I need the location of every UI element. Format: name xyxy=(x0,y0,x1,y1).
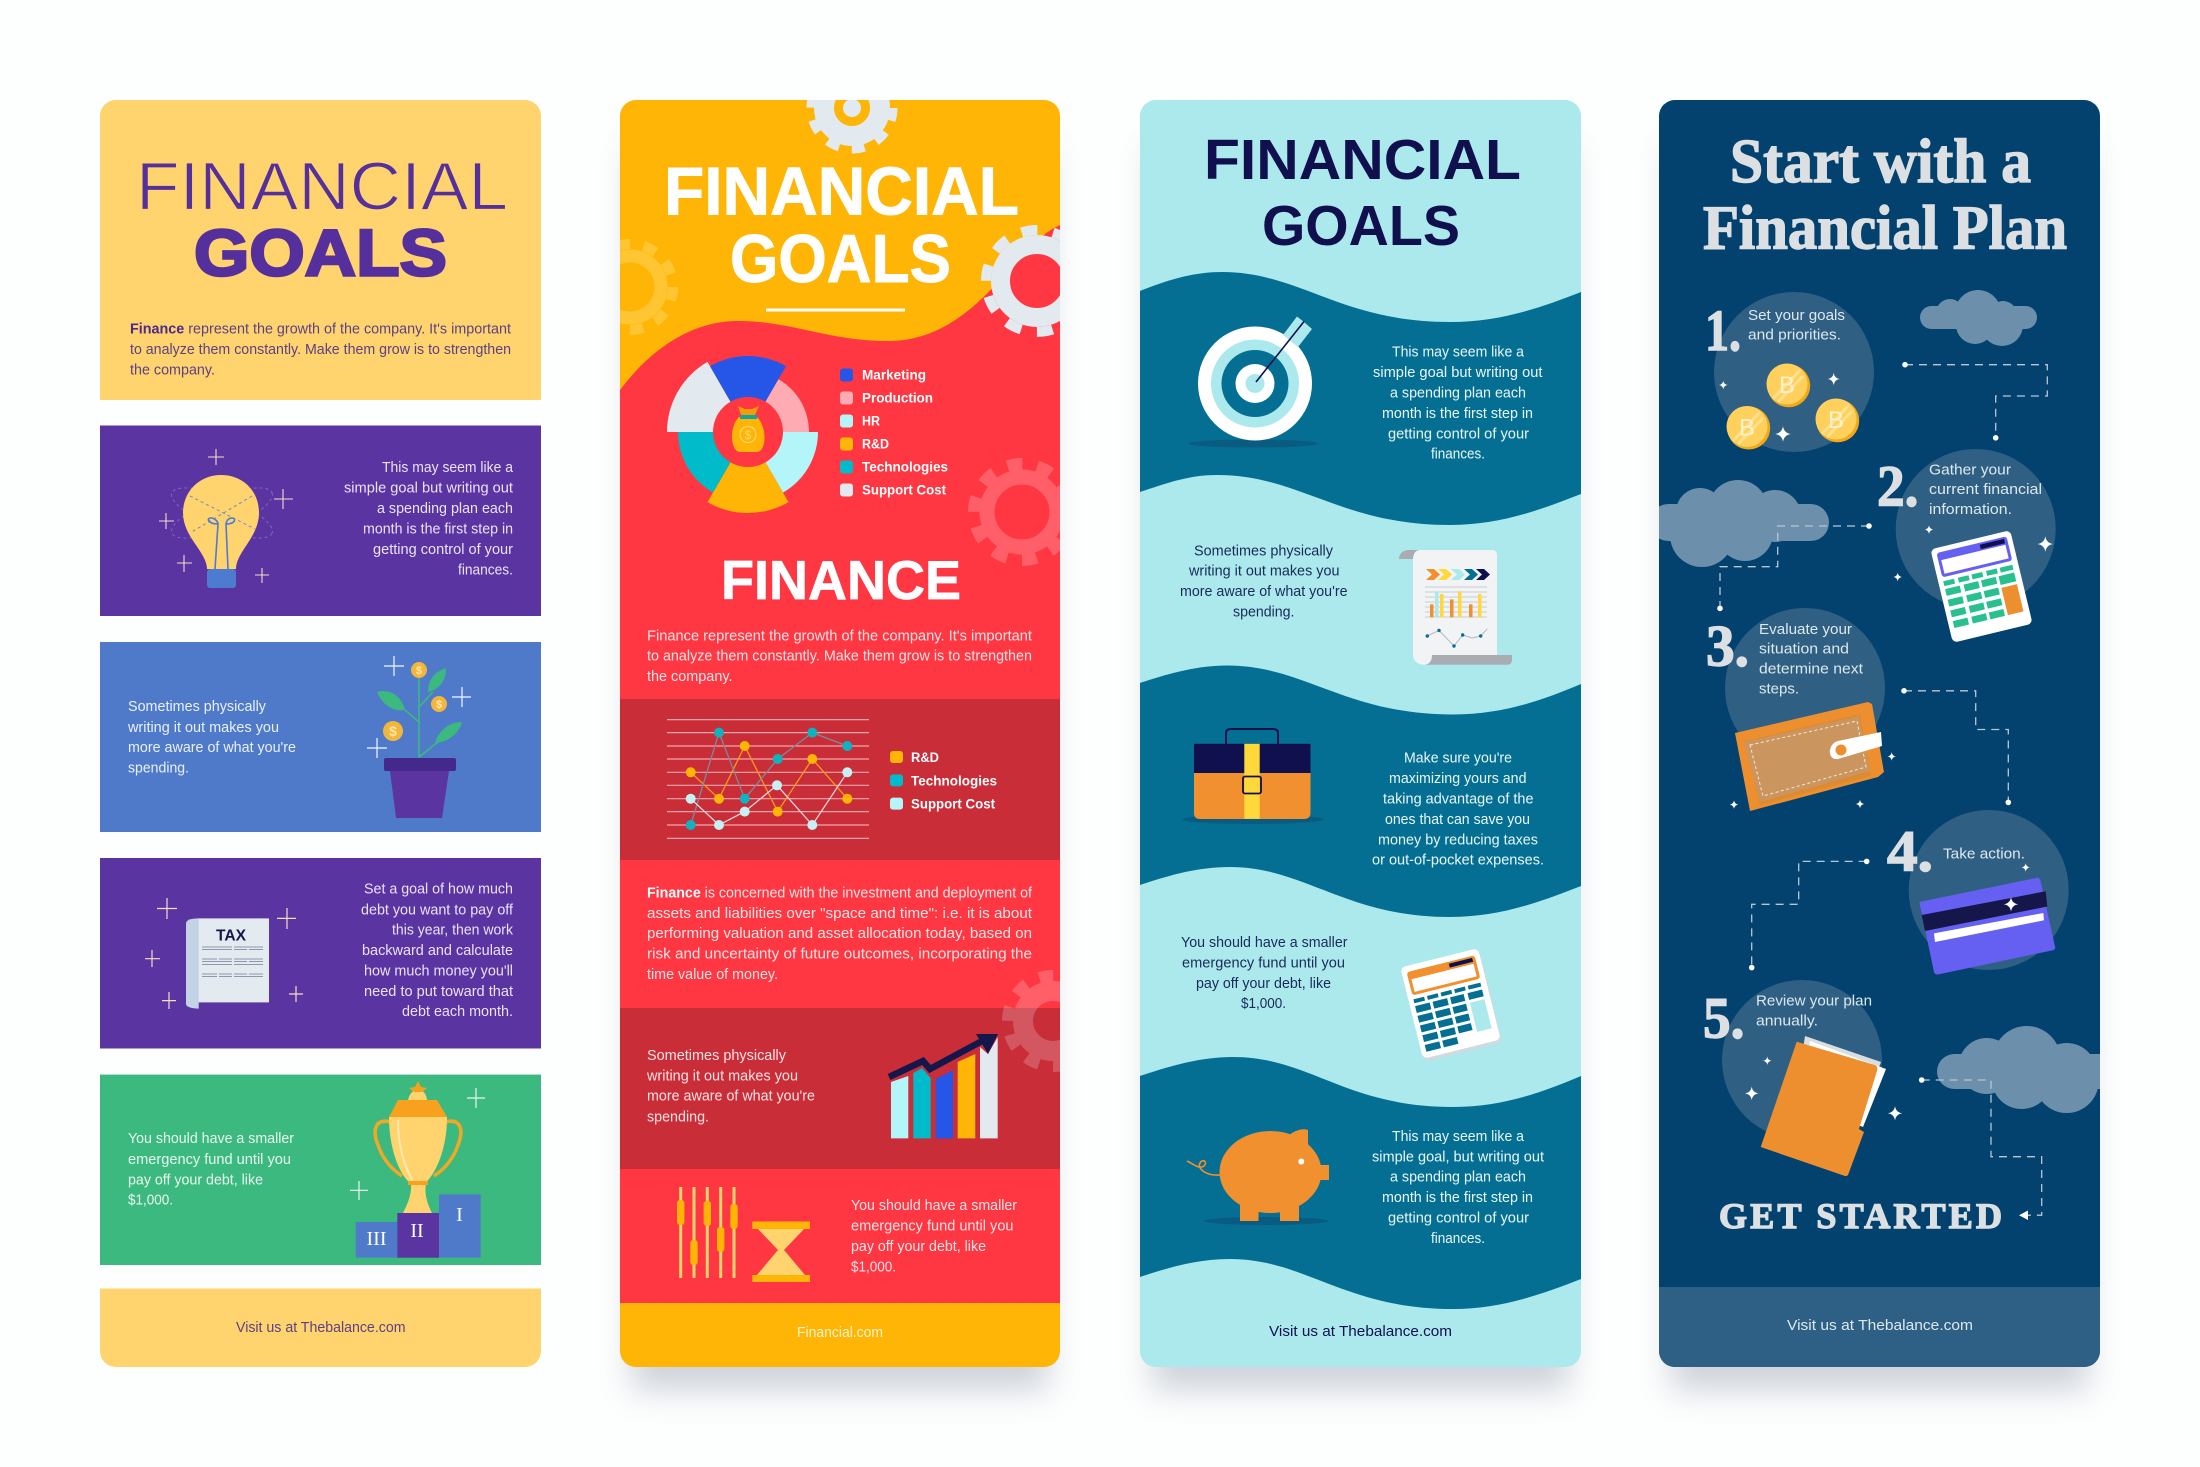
intro text xyxy=(647,628,1032,685)
icon: trophy on podium: I xyxy=(456,1204,463,1226)
text block: pay off your debt, like xyxy=(128,1172,263,1188)
step 3: determine next xyxy=(1759,661,1863,677)
paragraph: finance definition: performing valuation and asset allocation today, based on xyxy=(647,926,1032,942)
text block: emergency fund until you xyxy=(851,1218,1014,1234)
title xyxy=(1703,128,2067,262)
title: FINANCIAL xyxy=(1204,128,1521,192)
icon: sliders xyxy=(677,1187,738,1278)
paragraph: finance definition: risk and uncertainty of future outcomes, incorporating the xyxy=(647,947,1032,963)
text block: You should have a smaller xyxy=(128,1131,294,1147)
text block: maximizing yours and xyxy=(1389,771,1526,787)
pie chart legend: Production xyxy=(862,390,933,406)
intro text: to analyze them constantly. Make them grow is to strengthen xyxy=(647,648,1032,664)
icon: wallet xyxy=(1735,702,1884,811)
text block: getting control of your xyxy=(1388,1210,1529,1226)
pie chart legend: R&D xyxy=(862,436,889,452)
step 5: Review your plan xyxy=(1756,994,1872,1010)
icon: money plant: $ xyxy=(436,699,442,711)
tax label: TAX xyxy=(216,928,247,944)
pale background xyxy=(1140,100,1581,1367)
text block: month is the first step in xyxy=(1382,406,1533,422)
intro text: the company. xyxy=(130,362,215,378)
connector dots xyxy=(1717,362,2028,1220)
heading: finance: FINANCE xyxy=(721,549,961,611)
line chart legend xyxy=(890,750,997,812)
step 3: 3. xyxy=(1706,614,1749,678)
step 4: Take action. xyxy=(1943,847,2025,863)
footer xyxy=(100,1288,541,1368)
text block xyxy=(851,1198,1017,1276)
text block: a spending plan each xyxy=(1390,1170,1526,1186)
icon: sparkles xyxy=(350,1088,485,1200)
bar chart with arrow xyxy=(889,1034,998,1138)
text block: $1,000. xyxy=(128,1192,173,1208)
paragraph: finance definition xyxy=(647,885,1033,983)
text block: a spending plan each xyxy=(1390,385,1526,401)
text block: getting control of your xyxy=(1388,426,1529,442)
band: line chart xyxy=(620,699,1060,860)
text block: emergency fund until you xyxy=(1182,955,1345,971)
text block: month is the first step in xyxy=(1382,1190,1533,1206)
text block: more aware of what you're xyxy=(128,740,296,756)
line chart xyxy=(667,720,869,838)
panel shadows xyxy=(632,150,2088,1390)
step 3: Evaluate your xyxy=(1759,622,1852,638)
icon: target with arrow xyxy=(1188,316,1318,448)
panel: navy start with a financial plan xyxy=(1650,100,2117,1367)
text block xyxy=(128,1131,294,1208)
text block: Sometimes physically xyxy=(128,699,267,715)
text block: more aware of what you're xyxy=(1180,584,1348,600)
icon: trophy on podium: III xyxy=(367,1228,386,1250)
text block: pay off your debt, like xyxy=(1196,976,1331,992)
step 5: annually. xyxy=(1756,1014,1818,1030)
step 1: 1. xyxy=(1705,298,1741,363)
title: Financial Plan xyxy=(1703,194,2067,262)
text block: debt each month. xyxy=(402,1004,513,1020)
step 2: Gather your xyxy=(1929,463,2011,479)
text block: money by reducing taxes xyxy=(1378,832,1538,848)
text block: spending. xyxy=(128,760,189,776)
panel: teal waves financial goals xyxy=(1140,100,1581,1367)
header block xyxy=(100,100,541,400)
intro text: the company. xyxy=(647,669,732,685)
icon: money bag xyxy=(732,406,765,452)
intro text: Finance represent the growth of the company. It's important xyxy=(647,628,1032,644)
cloud: lower right xyxy=(1937,1026,2117,1113)
icon: calculator xyxy=(1400,948,1502,1062)
text block xyxy=(1372,751,1544,869)
dashed connectors xyxy=(1720,365,2047,1215)
text block: taking advantage of the xyxy=(1383,792,1534,808)
cloud: top right xyxy=(1920,290,2037,346)
title: GOALS xyxy=(730,221,951,297)
text block: a spending plan each xyxy=(377,501,513,517)
step 2: information. xyxy=(1929,502,2012,518)
gear: faint right xyxy=(974,464,1070,560)
panel: red and orange finance xyxy=(620,100,1060,1367)
text block: ones that can save you xyxy=(1385,812,1530,828)
step 1 xyxy=(1705,298,1859,450)
title xyxy=(1204,128,1521,258)
paragraph: finance definition: Finance is concerned with the investment and deployment of xyxy=(647,885,1033,901)
text block: Make sure you're xyxy=(1404,751,1512,767)
text block: finances. xyxy=(458,563,513,579)
text block: spending. xyxy=(1233,605,1294,621)
icon: sparkles xyxy=(159,449,293,583)
icon: sparkles xyxy=(145,898,303,1009)
icon: bitcoin coins: B xyxy=(1739,414,1755,442)
text block: getting control of your xyxy=(373,542,513,558)
icon: trophy on podium: II xyxy=(410,1220,424,1242)
icon: sparkles xyxy=(367,656,471,758)
text block: finances. xyxy=(1431,446,1485,462)
text block: $1,000. xyxy=(851,1260,896,1276)
icon: money plant: $ xyxy=(389,723,397,739)
text block: Set a goal of how much xyxy=(364,882,513,898)
text block xyxy=(1372,1129,1544,1247)
text block xyxy=(361,882,514,1020)
text block: Sometimes physically xyxy=(647,1048,787,1064)
pie chart legend xyxy=(840,368,948,498)
section: light bulb xyxy=(100,426,541,616)
icon: bitcoin coins xyxy=(1726,364,1859,450)
text block: writing it out makes you xyxy=(127,720,279,736)
step 5: 5. xyxy=(1703,985,1744,1050)
section: money plant xyxy=(100,642,541,832)
icon: bitcoin coins: B xyxy=(1779,372,1795,399)
text block: This may seem like a xyxy=(1392,345,1525,361)
text block: This may seem like a xyxy=(1392,1129,1525,1145)
step 1: and priorities. xyxy=(1748,328,1841,344)
icon: trophy on podium xyxy=(356,1081,481,1258)
circles xyxy=(1714,292,2069,1140)
icon: light bulb xyxy=(166,475,278,588)
icon: report scroll xyxy=(1399,550,1512,665)
pie chart legend: HR xyxy=(862,414,880,428)
icon: money bag: $ xyxy=(745,428,752,442)
text block: $1,000. xyxy=(1241,996,1286,1012)
pie chart legend: Technologies xyxy=(862,460,948,474)
icon: credit card xyxy=(1919,878,2055,975)
gear: faint left xyxy=(620,239,678,335)
pie chart legend: Marketing xyxy=(862,368,926,382)
call to action: get started: GET STARTED xyxy=(1719,1196,2002,1236)
text block: simple goal but writing out xyxy=(1373,365,1542,381)
footer text: Visit us at Thebalance.com xyxy=(1269,1324,1452,1340)
text block: You should have a smaller xyxy=(1181,935,1348,951)
text block: more aware of what you're xyxy=(647,1088,815,1104)
text block xyxy=(1181,935,1348,1012)
title xyxy=(664,154,1019,312)
wave band 1 xyxy=(1140,272,1581,525)
text block xyxy=(1180,543,1348,621)
wave band 3 xyxy=(1140,1057,1581,1309)
text block: pay off your debt, like xyxy=(851,1239,986,1255)
intro text xyxy=(130,322,511,378)
step 3: situation and xyxy=(1759,641,1849,657)
footer xyxy=(620,1303,1060,1367)
footer: Financial.com xyxy=(797,1325,883,1341)
wave band 2 xyxy=(1140,666,1581,917)
step 4 xyxy=(1887,818,2055,975)
icon: bitcoin coins: B xyxy=(1828,407,1844,434)
navy background xyxy=(1659,100,2100,1367)
sparkles xyxy=(1719,373,2053,1120)
step 2: 2. xyxy=(1877,454,1918,518)
step 2 xyxy=(1877,454,2042,643)
text block: spending. xyxy=(647,1110,709,1126)
text block: how much money you'll xyxy=(364,964,513,980)
icon: money plant: $ xyxy=(416,665,422,677)
text block: need to put toward that xyxy=(364,984,513,1000)
title: goals: GOALS xyxy=(194,216,447,290)
line chart legend: R&D xyxy=(911,750,939,765)
step 5 xyxy=(1703,985,1886,1176)
title: Start with a xyxy=(1730,128,2031,196)
line chart legend: Support Cost xyxy=(911,797,995,812)
intro text: Finance represent the growth of the company. It's important xyxy=(130,322,511,338)
text block xyxy=(1373,345,1542,462)
step 3 xyxy=(1706,614,1884,811)
footer: Visit us at Thebalance.com xyxy=(236,1320,406,1336)
icon: folder with papers xyxy=(1761,1036,1886,1176)
text block: simple goal but writing out xyxy=(344,481,513,497)
text block: debt you want to pay off xyxy=(361,902,514,918)
icon: piggy bank xyxy=(1187,1129,1329,1225)
text block: You should have a smaller xyxy=(851,1198,1017,1214)
step 4: 4. xyxy=(1887,818,1933,884)
cloud: left xyxy=(1650,480,1829,567)
intro text: to analyze them constantly. Make them grow is to strengthen xyxy=(130,342,511,358)
text block: finances. xyxy=(1431,1231,1485,1247)
text block: writing it out makes you xyxy=(646,1068,798,1084)
text block: Sometimes physically xyxy=(1194,543,1334,559)
pie chart xyxy=(667,356,818,513)
title: financial: FINANCIAL xyxy=(136,148,508,224)
icon: money plant xyxy=(377,662,462,818)
paragraph: finance definition: assets and liabilities over "space and time": i.e. it is about xyxy=(647,906,1032,922)
text block xyxy=(344,460,514,579)
text block: emergency fund until you xyxy=(128,1152,291,1168)
line chart legend: Technologies xyxy=(911,773,997,788)
title: FINANCIAL xyxy=(664,154,1019,230)
step 3: steps. xyxy=(1759,681,1799,697)
text block xyxy=(646,1048,815,1126)
section: tax document xyxy=(100,858,541,1048)
text block: this year, then work xyxy=(392,922,514,938)
step 2: current financial xyxy=(1929,482,2042,498)
panel: yellow and purple financial goals xyxy=(100,100,541,1368)
section: trophy xyxy=(100,1075,541,1265)
icon: briefcase xyxy=(1182,729,1324,824)
text block: backward and calculate xyxy=(362,943,513,959)
text block: month is the first step in xyxy=(363,522,513,538)
icon: hourglass xyxy=(752,1222,810,1282)
step 1: Set your goals xyxy=(1748,308,1845,324)
footer bar xyxy=(1659,1287,2100,1367)
gear: right xyxy=(981,225,1060,337)
paragraph: finance definition: time value of money. xyxy=(647,967,778,983)
title: GOALS xyxy=(1262,194,1460,258)
gear: faint lower xyxy=(1008,976,1098,1066)
pie chart legend: Support Cost xyxy=(862,482,946,498)
text block: or out-of-pocket expenses. xyxy=(1372,853,1544,869)
orange top background xyxy=(620,100,1060,420)
text block: This may seem like a xyxy=(382,460,514,476)
icon: tax document xyxy=(186,918,269,1009)
gear: top xyxy=(806,100,898,154)
text block xyxy=(127,699,296,776)
footer bar: Visit us at Thebalance.com xyxy=(1787,1318,1973,1334)
text block: writing it out makes you xyxy=(1188,563,1340,579)
band: bar chart xyxy=(620,1008,1060,1169)
text block: simple goal, but writing out xyxy=(1372,1149,1544,1165)
icon: calculator xyxy=(1930,530,2033,643)
red wave background xyxy=(620,225,1060,1310)
